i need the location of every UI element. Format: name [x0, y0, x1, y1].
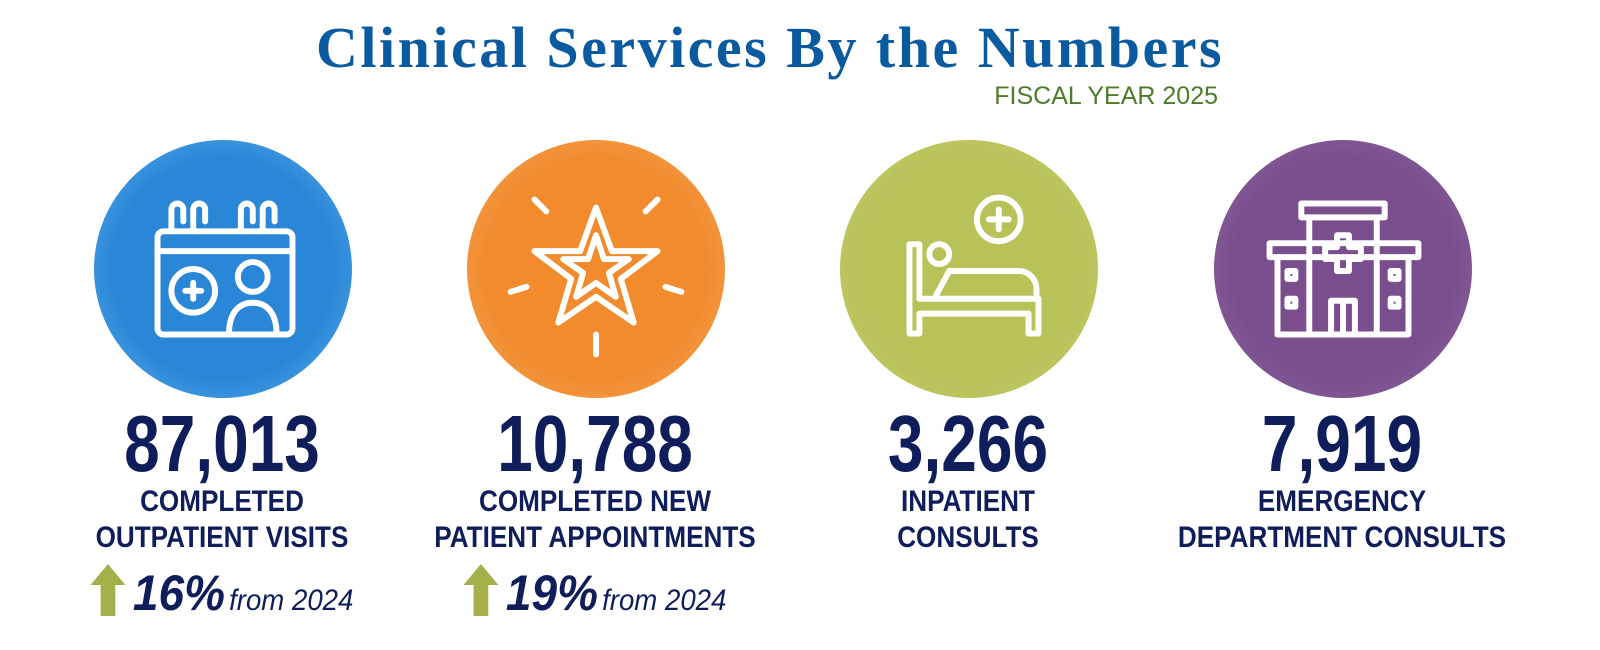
panel: new patient appointments [434, 140, 756, 621]
label: DEPARTMENT CONSULTS [1178, 521, 1506, 554]
change indicator: 19% from 2024 [506, 565, 726, 621]
icon: calendar with doctor (blue circle) [94, 140, 352, 398]
label [434, 485, 756, 554]
number: 87,013 [124, 399, 320, 488]
label: CONSULTS [897, 521, 1039, 554]
title: Clinical Services By the Numbers [316, 15, 1224, 80]
number: 3,266 [888, 399, 1048, 488]
panel: emergency department consults [1178, 140, 1506, 554]
icon: hospital bed (green circle) [840, 140, 1098, 398]
label: OUTPATIENT VISITS [96, 521, 348, 554]
panel: inpatient consults [840, 140, 1098, 554]
panel: outpatient visits [90, 140, 353, 621]
number: 10,788 [497, 399, 693, 488]
label [96, 485, 348, 554]
label: EMERGENCY [1258, 485, 1426, 518]
change indicator: 16% from 2024 [133, 565, 353, 621]
icon: hospital building (purple circle) [1214, 140, 1472, 398]
label: COMPLETED [140, 485, 304, 518]
label: PATIENT APPOINTMENTS [434, 521, 756, 554]
icon: star (orange circle) [467, 140, 725, 398]
label [1178, 485, 1506, 554]
subtitle: fiscal year: FISCAL YEAR 2025 [994, 82, 1218, 110]
number: 7,919 [1262, 399, 1422, 488]
label: INPATIENT [901, 485, 1035, 518]
label [897, 485, 1039, 554]
label: COMPLETED NEW [479, 485, 711, 518]
